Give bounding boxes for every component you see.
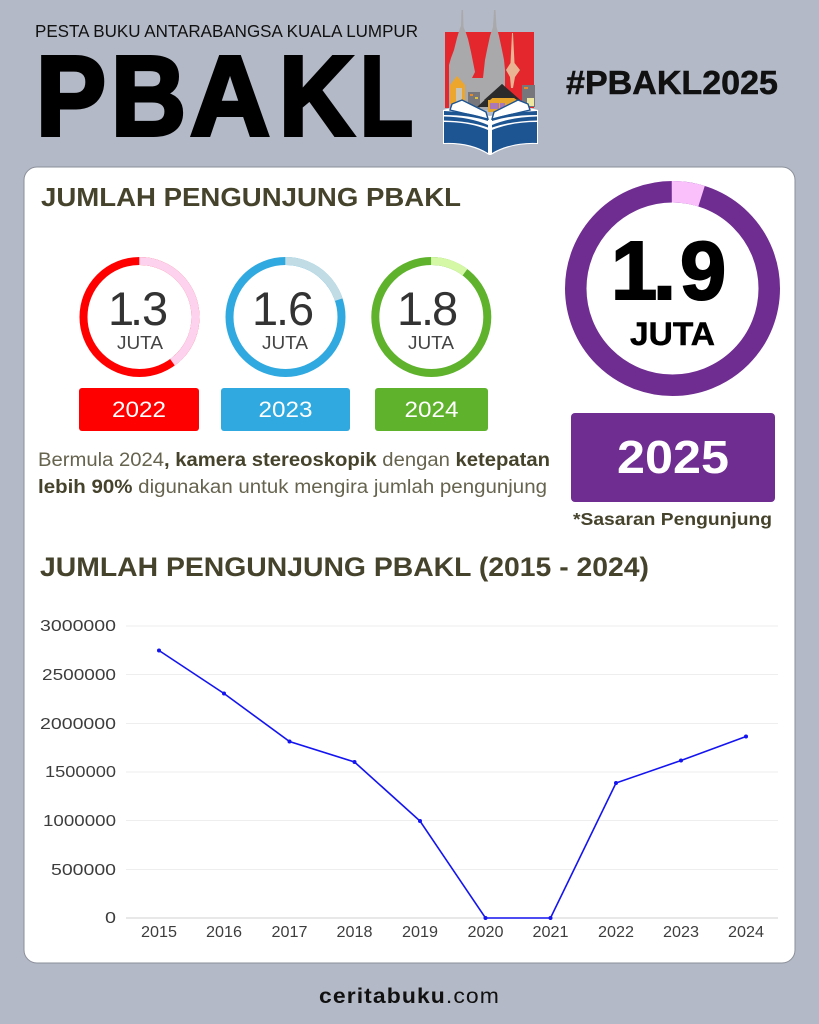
year label 2025: 2025 [617,431,729,483]
line chart: 1000000 [43,813,116,830]
line chart: 2017 [272,924,308,941]
title: PBAKL: P [36,33,106,159]
donut 2025 target: 1.9 [611,224,726,317]
heading: visitor count: JUMLAH PENGUNJUNG PBAKL [41,182,461,212]
donut 2025 target: JUTA [630,316,715,352]
icon: PBAKL logo [443,10,538,155]
line chart: 0 [105,910,116,927]
panel: main card [24,167,795,963]
donut 2023: JUTA [262,333,308,353]
text block: method note: lebih 90% digunakan untuk mengira jumlah pengunjung [38,477,547,498]
line chart: 500000 [51,862,116,879]
hashtag: #PBAKL2025 [566,64,778,101]
title: PBAKL: B [111,33,186,159]
header subtitle: PESTA BUKU ANTARABANGSA KUALA LUMPUR [35,21,418,41]
target note: *Sasaran Pengunjung [573,509,772,529]
line chart: 2024 [728,924,764,941]
line chart: 2023 [663,924,699,941]
donut 2022 [84,261,196,373]
line chart: 1500000 [45,764,116,781]
donut 2023: 1.6 [252,282,314,335]
footer: source: ceritabuku .com [319,985,500,1008]
year label 2022: 2022 [112,397,166,422]
line chart [40,618,778,941]
line chart: 2018 [336,924,372,941]
line chart: 2021 [532,924,568,941]
line chart: 2019 [402,924,438,941]
line chart: 2000000 [40,716,116,733]
year label 2025 [571,413,775,502]
line chart: 2016 [206,924,242,941]
year label 2023 [221,388,350,431]
donut 2022: 1.3 [108,282,168,335]
donut 2022: JUTA [117,333,163,353]
year label 2024 [375,388,488,431]
donut 2023 [230,261,342,373]
title: PBAKL: K [279,33,354,159]
title: PBAKL: A [190,33,270,159]
line chart: 2500000 [42,667,116,684]
title: PBAKL: L [360,33,413,159]
title: PBAKL [36,33,413,159]
line chart: 2020 [468,924,504,941]
year label 2022 [79,388,199,431]
text block: method note [38,450,550,498]
year label 2023: 2023 [258,397,312,422]
text block: method note: Bermula 2024 , kamera stereoskopik dengan ketepatan [38,450,550,471]
donut 2025 target [576,192,769,385]
donut 2024 [375,261,487,373]
line chart: 2022 [598,924,634,941]
line chart: 3000000 [40,618,116,635]
donut 2024: 1.8 [397,282,458,335]
year label 2024: 2024 [404,397,458,422]
donut 2024: JUTA [408,333,454,353]
heading: line chart: JUMLAH PENGUNJUNG PBAKL (2015 - 2024) [40,552,649,582]
line chart: 2015 [141,924,177,941]
